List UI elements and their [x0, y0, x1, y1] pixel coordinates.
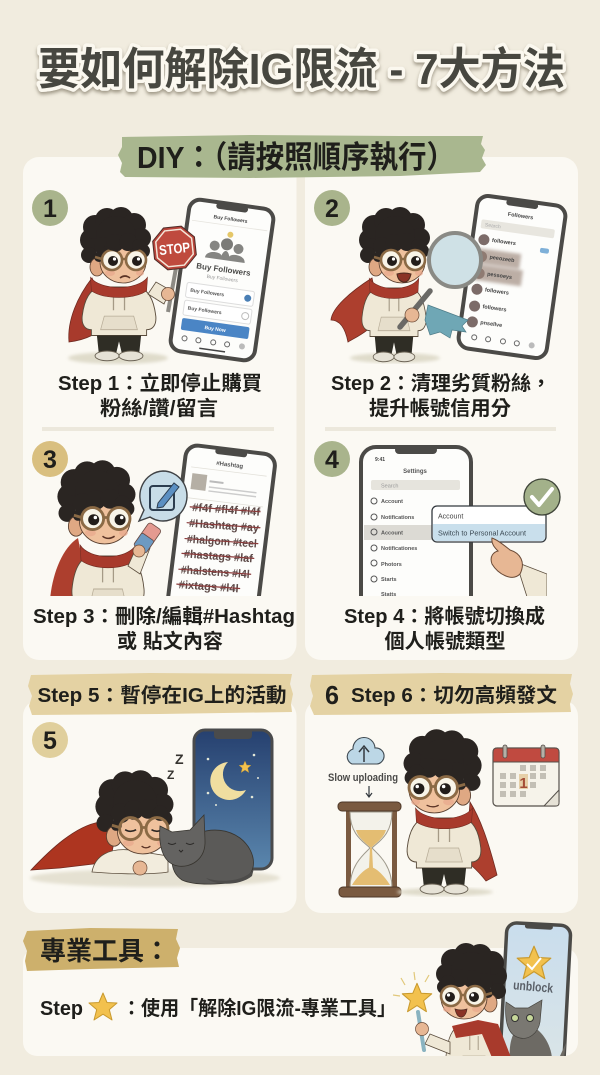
hashtag list struck through: #f4f #fl4f #l4f	[192, 502, 261, 519]
text: step 1 label	[58, 371, 262, 420]
icon: magnifying glass	[400, 233, 481, 327]
badge: 3: 3	[43, 446, 57, 474]
banner: professional tool heading	[23, 928, 180, 971]
title: 要如何解除IG限流 - 7大方法	[38, 45, 565, 94]
panel: step 6 card	[305, 700, 578, 913]
icon: sleeping z letters: Z	[175, 751, 184, 767]
hashtag list struck through	[176, 501, 261, 597]
icon: magic wand	[393, 972, 432, 1050]
illustration: step 1 stop buying followers	[68, 207, 198, 364]
icon: sleeping z letters	[167, 751, 184, 782]
icon: feather duster	[425, 305, 468, 338]
badge: 2: 2	[325, 195, 339, 223]
cat	[506, 1000, 566, 1060]
popup: switch to personal account	[432, 506, 546, 542]
phone: settings screen: Account	[381, 499, 403, 505]
text: step 4 label: 個人帳號類型	[384, 630, 506, 653]
icon: edit speech bubble	[139, 471, 187, 521]
phone: followers screen: Search	[485, 222, 501, 230]
phone: settings screen: Photors	[381, 562, 402, 568]
icon: moon	[210, 762, 246, 800]
icon: check mark	[524, 479, 560, 515]
icon: sleeping z letters: Z	[167, 768, 174, 782]
phone: followers screen: peeozeeb	[489, 255, 515, 264]
banner: step 6 heading: Step 6：切勿高頻發文	[351, 683, 557, 707]
hashtag list struck through: #halgom #teel	[187, 534, 257, 551]
phone: buy followers screen: Buy Now	[204, 325, 226, 334]
illustration: step 3 boy with eraser	[50, 460, 161, 596]
icon: star	[89, 993, 117, 1020]
text: step 4 label: Step 4：將帳號切換成	[344, 604, 545, 628]
phone: settings screen: Account	[381, 530, 403, 536]
text: step 3 label: Step 3：刪除/編輯#Hashtag	[33, 604, 295, 628]
phone: settings screen: Notifications	[381, 515, 414, 521]
text: step 3 label: 或 貼文內容	[117, 629, 223, 653]
illustration: step 6 boy standing	[397, 729, 497, 896]
badge: 4: 4	[325, 446, 339, 474]
text: step 2 label: Step 2：清理劣質粉絲，	[331, 372, 551, 395]
phone: buy followers screen: Buy Followers	[190, 288, 225, 298]
illustration: pointing hand	[491, 538, 547, 600]
text: step 1 label: 粉絲/讚/留言	[100, 396, 218, 420]
text: step 1 label: Step 1：立即停止購買	[58, 371, 262, 395]
text: step 2 label	[331, 372, 551, 420]
badge: 5	[32, 722, 68, 758]
icon: calendar	[493, 745, 559, 806]
text: step star tool line: Step	[40, 998, 83, 1020]
icon: eraser	[133, 522, 162, 553]
popup: switch to personal account: Switch to Personal Account	[438, 530, 526, 538]
icon: calendar: 1	[519, 775, 528, 792]
phone: followers screen: followers	[482, 304, 507, 314]
icon: stop sign: STOP	[158, 239, 191, 258]
hashtag list struck through: #hastags #laf	[183, 549, 253, 565]
text: slow uploading: Slow uploading	[328, 772, 398, 784]
banner: DIY heading: DIY：（請按照順序執行）	[137, 140, 455, 175]
divider right	[325, 427, 556, 431]
text: step star tool line	[40, 993, 396, 1020]
phone: settings screen: 9:41	[375, 457, 385, 463]
phone: followers screen: followers	[491, 238, 516, 247]
panel: step 5 card	[23, 700, 296, 913]
phone: night mode	[194, 730, 272, 869]
phone: followers screen	[457, 195, 567, 359]
phone: buy followers screen: Buy Followers	[196, 261, 252, 278]
phone: settings screen: Search	[381, 484, 398, 490]
illustration: step 2 clean low quality followers	[331, 207, 481, 363]
phone: followers screen: followers	[484, 287, 509, 297]
phone: buy followers screen: Buy Followers	[206, 274, 239, 284]
phone: settings screen: Statts	[381, 592, 396, 598]
illustration: boy with magic wand	[425, 943, 510, 1056]
illustration: step 5 sleeping boy and cat	[30, 770, 280, 887]
panel: professional tool card	[23, 948, 578, 1056]
popup: switch to personal account: Account	[438, 514, 463, 520]
panel: step 1 and step 3 card	[23, 157, 296, 660]
phone: settings screen: Starts	[381, 577, 397, 583]
cat	[160, 815, 254, 884]
phone: hashtag screen	[166, 444, 277, 596]
hashtag list struck through: #Hashtag #ay	[189, 518, 260, 535]
icon: stop sign	[151, 225, 198, 271]
divider left	[42, 427, 274, 431]
hashtag list struck through: #halstens #l4l	[180, 564, 250, 581]
banner: step 5 heading: Step 5：暫停在IG上的活動	[38, 683, 286, 707]
badge: 5: 5	[43, 727, 57, 755]
phone: followers screen: pessoeys	[487, 272, 512, 281]
badge: 2	[314, 190, 350, 226]
hashtag list struck through: #ixtags #l4l	[178, 579, 239, 595]
badge: 1	[32, 190, 68, 226]
phone: settings screen	[361, 446, 471, 617]
phone: settings screen: Settings	[403, 469, 427, 475]
illustration: hourglass	[338, 802, 401, 897]
badge: 4	[314, 441, 350, 477]
arrow: down	[366, 786, 372, 797]
text: step star tool line: ：使用「解除IG限流-專業工具」	[122, 996, 396, 1020]
phone: settings screen: Notificationes	[381, 546, 417, 552]
banner: step 6 heading	[310, 673, 573, 715]
phone: buy followers screen: Buy Followers	[187, 306, 222, 316]
badge: 3	[32, 441, 68, 477]
phone: unblock	[500, 921, 572, 1056]
icon: upload cloud	[347, 737, 384, 764]
phone: hashtag screen: #Hashtag	[216, 461, 244, 470]
banner: step 6 heading: 6	[325, 680, 339, 710]
panel: step 2 and step 4 card	[305, 157, 578, 660]
text: step 4 label	[344, 604, 545, 653]
text: step 2 label: 提升帳號信用分	[369, 397, 511, 420]
phone: followers screen: Followers	[507, 212, 534, 221]
phone: unblock: unblock	[513, 977, 554, 996]
phone: buy followers screen	[169, 198, 275, 362]
banner: step 5 heading	[28, 673, 293, 715]
banner: professional tool heading: 專業工具：	[40, 936, 170, 966]
phone: followers screen: pnsellve	[480, 320, 503, 329]
badge: 1: 1	[43, 195, 57, 223]
phone: buy followers screen: Buy Followers	[213, 214, 248, 225]
text: step 3 label	[33, 604, 295, 653]
